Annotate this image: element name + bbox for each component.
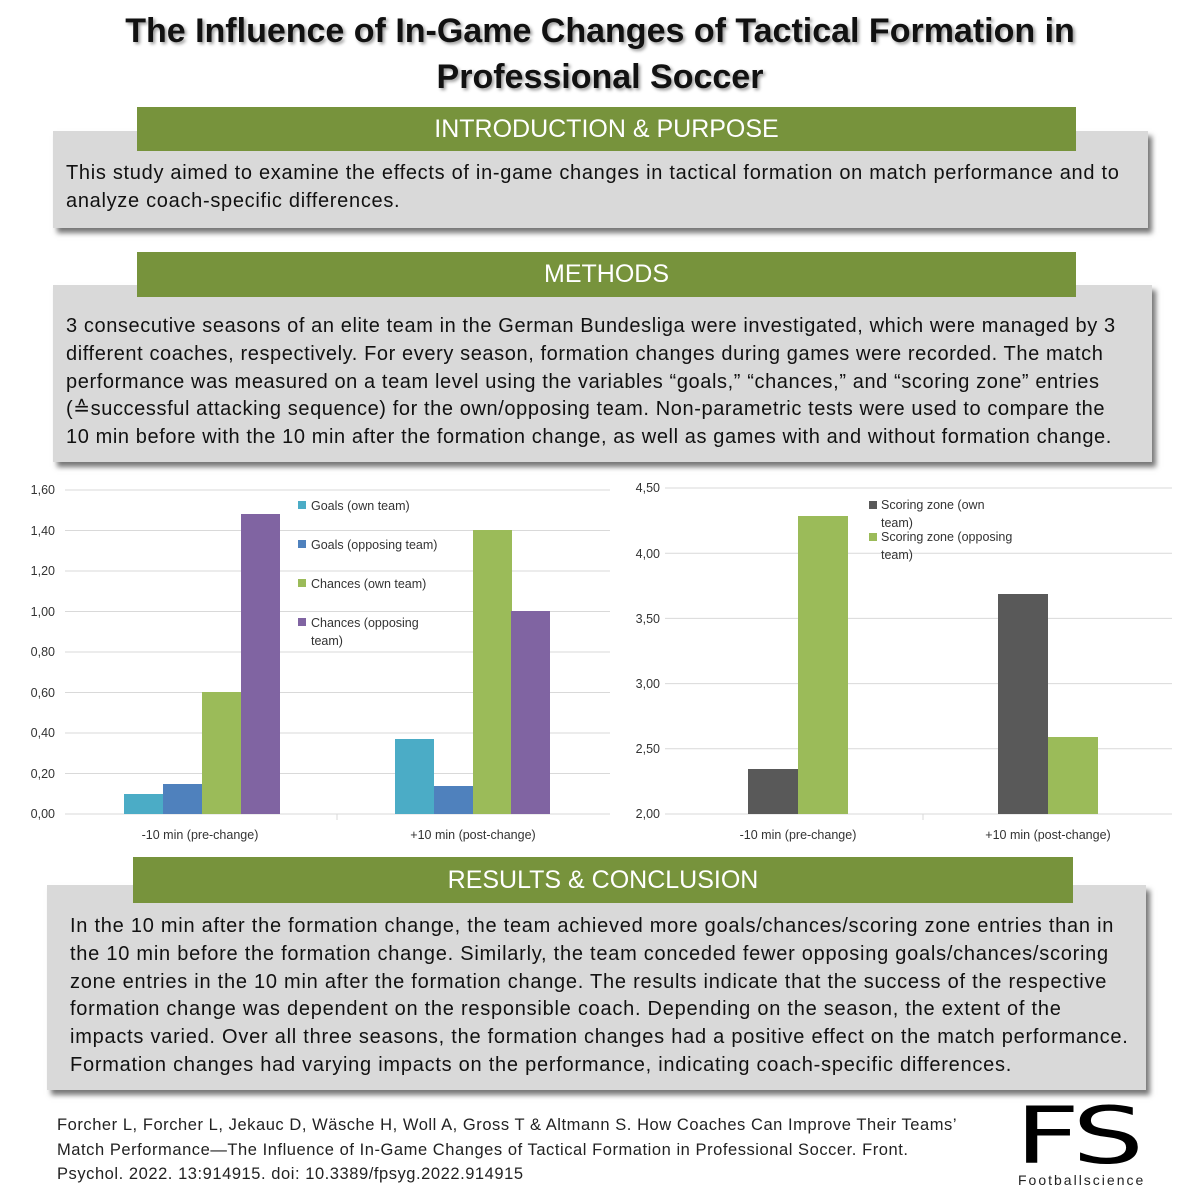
citation: Match Performance—The Influence of In-Game Changes of Tactical Formation in Professional Soccer. Front.	[57, 1140, 908, 1158]
citation: Psychol. 2022. 13:914915. doi: 10.3389/fpsyg.2022.914915	[57, 1165, 524, 1183]
chart: goals and chances	[31, 483, 610, 842]
chart: goals and chances: 0,40	[31, 726, 55, 740]
chart: scoring zone: 2,50	[636, 742, 660, 756]
chart: scoring zone: -10 min (pre-change)	[740, 828, 856, 842]
title	[125, 12, 1077, 96]
chart: scoring zone: Scoring zone (opposing	[881, 530, 1012, 544]
heading: methods	[137, 252, 1076, 297]
panel: introduction	[53, 131, 1148, 228]
chart: goals and chances: Goals (own team)	[311, 499, 410, 513]
panel: methods	[53, 285, 1152, 462]
chart: goals and chances: 0,60	[31, 686, 55, 700]
chart: goals and chances: -10 min (pre-change)	[142, 828, 258, 842]
chart: scoring zone: 4,50	[636, 481, 660, 495]
panel: introduction: This study aimed to examine the effects of in-game changes in tactical formation on match performance and to	[66, 162, 1120, 184]
heading: methods: METHODS	[544, 260, 669, 288]
logo: Footballscience: FS	[1015, 1092, 1138, 1182]
chart: goals and chances: 1,00	[31, 605, 55, 619]
chart: goals and chances: 0,00	[31, 807, 55, 821]
chart: scoring zone: 3,50	[636, 612, 660, 626]
chart: scoring zone: Scoring zone (own	[881, 498, 985, 512]
chart: scoring zone: 3,00	[636, 677, 660, 691]
chart: goals and chances: 1,20	[31, 564, 55, 578]
heading: results	[133, 857, 1073, 903]
panel: methods: (≙successful attacking sequence) for the own/opposing team. Non-parametric tests were used to compare the	[66, 398, 1105, 420]
citation: Forcher L, Forcher L, Jekauc D, Wäsche H, Woll A, Gross T & Altmann S. How Coaches Can Improve Their Teams’	[57, 1116, 957, 1134]
panel: results: zone entries in the 10 min after the formation change. The results indicate that the success of the respective	[70, 971, 1107, 993]
chart: goals and chances: +10 min (post-change)	[410, 828, 536, 842]
panel: results: Formation changes had varying impacts on the performance, indicating coach-specific differences.	[70, 1054, 1012, 1076]
chart: goals and chances: 1,40	[31, 524, 55, 538]
chart: goals and chances: 1,60	[31, 483, 55, 497]
chart: goals and chances: 0,20	[31, 767, 55, 781]
panel: methods: different coaches, respectively. For every season, formation changes during games were recorded. The match	[66, 343, 1103, 365]
title: The Influence of In-Game Changes of Tactical Formation in	[125, 12, 1075, 50]
panel: methods: 3 consecutive seasons of an elite team in the German Bundesliga were investigated, which were managed by 3	[66, 315, 1116, 337]
panel: results: formation change was dependent on the responsible coach. Depending on the season, the extent of the	[70, 998, 1062, 1020]
heading: introduction	[137, 107, 1076, 151]
chart: scoring zone: 2,00	[636, 807, 660, 821]
chart: scoring zone: 4,00	[636, 547, 660, 561]
panel: introduction: analyze coach-specific differences.	[66, 190, 400, 212]
chart: goals and chances: 0,80	[31, 645, 55, 659]
panel: results: the 10 min before the formation change. Similarly, the team conceded fewer opposing goals/chances/scoring	[70, 943, 1109, 965]
chart: goals and chances: Chances (opposing	[311, 616, 419, 630]
chart: goals and chances: team)	[311, 634, 343, 648]
citation	[57, 1116, 957, 1183]
chart: scoring zone: +10 min (post-change)	[985, 828, 1111, 842]
panel: methods: performance was measured on a team level using the variables “goals,” “chances,” and “scoring zone” entries	[66, 371, 1100, 393]
chart: scoring zone	[636, 481, 1172, 842]
heading: introduction: INTRODUCTION & PURPOSE	[434, 115, 779, 143]
panel: results: impacts varied. Over all three seasons, the formation changes had a positive effect on the match performance.	[70, 1026, 1129, 1048]
chart: scoring zone: team)	[881, 516, 913, 530]
chart: goals and chances: Goals (opposing team)	[311, 538, 437, 552]
panel: results	[47, 885, 1146, 1090]
logo: Footballscience: Footballscience	[1018, 1172, 1145, 1188]
panel: methods: 10 min before with the 10 min after the formation change, as well as games with and without formation change.	[66, 426, 1112, 448]
chart: scoring zone: team)	[881, 548, 913, 562]
title: Professional Soccer	[437, 58, 763, 96]
chart: goals and chances: Chances (own team)	[311, 577, 426, 591]
panel: results: In the 10 min after the formation change, the team achieved more goals/chances/scoring zone entries than in	[70, 915, 1114, 937]
heading: results: RESULTS & CONCLUSION	[448, 866, 758, 894]
